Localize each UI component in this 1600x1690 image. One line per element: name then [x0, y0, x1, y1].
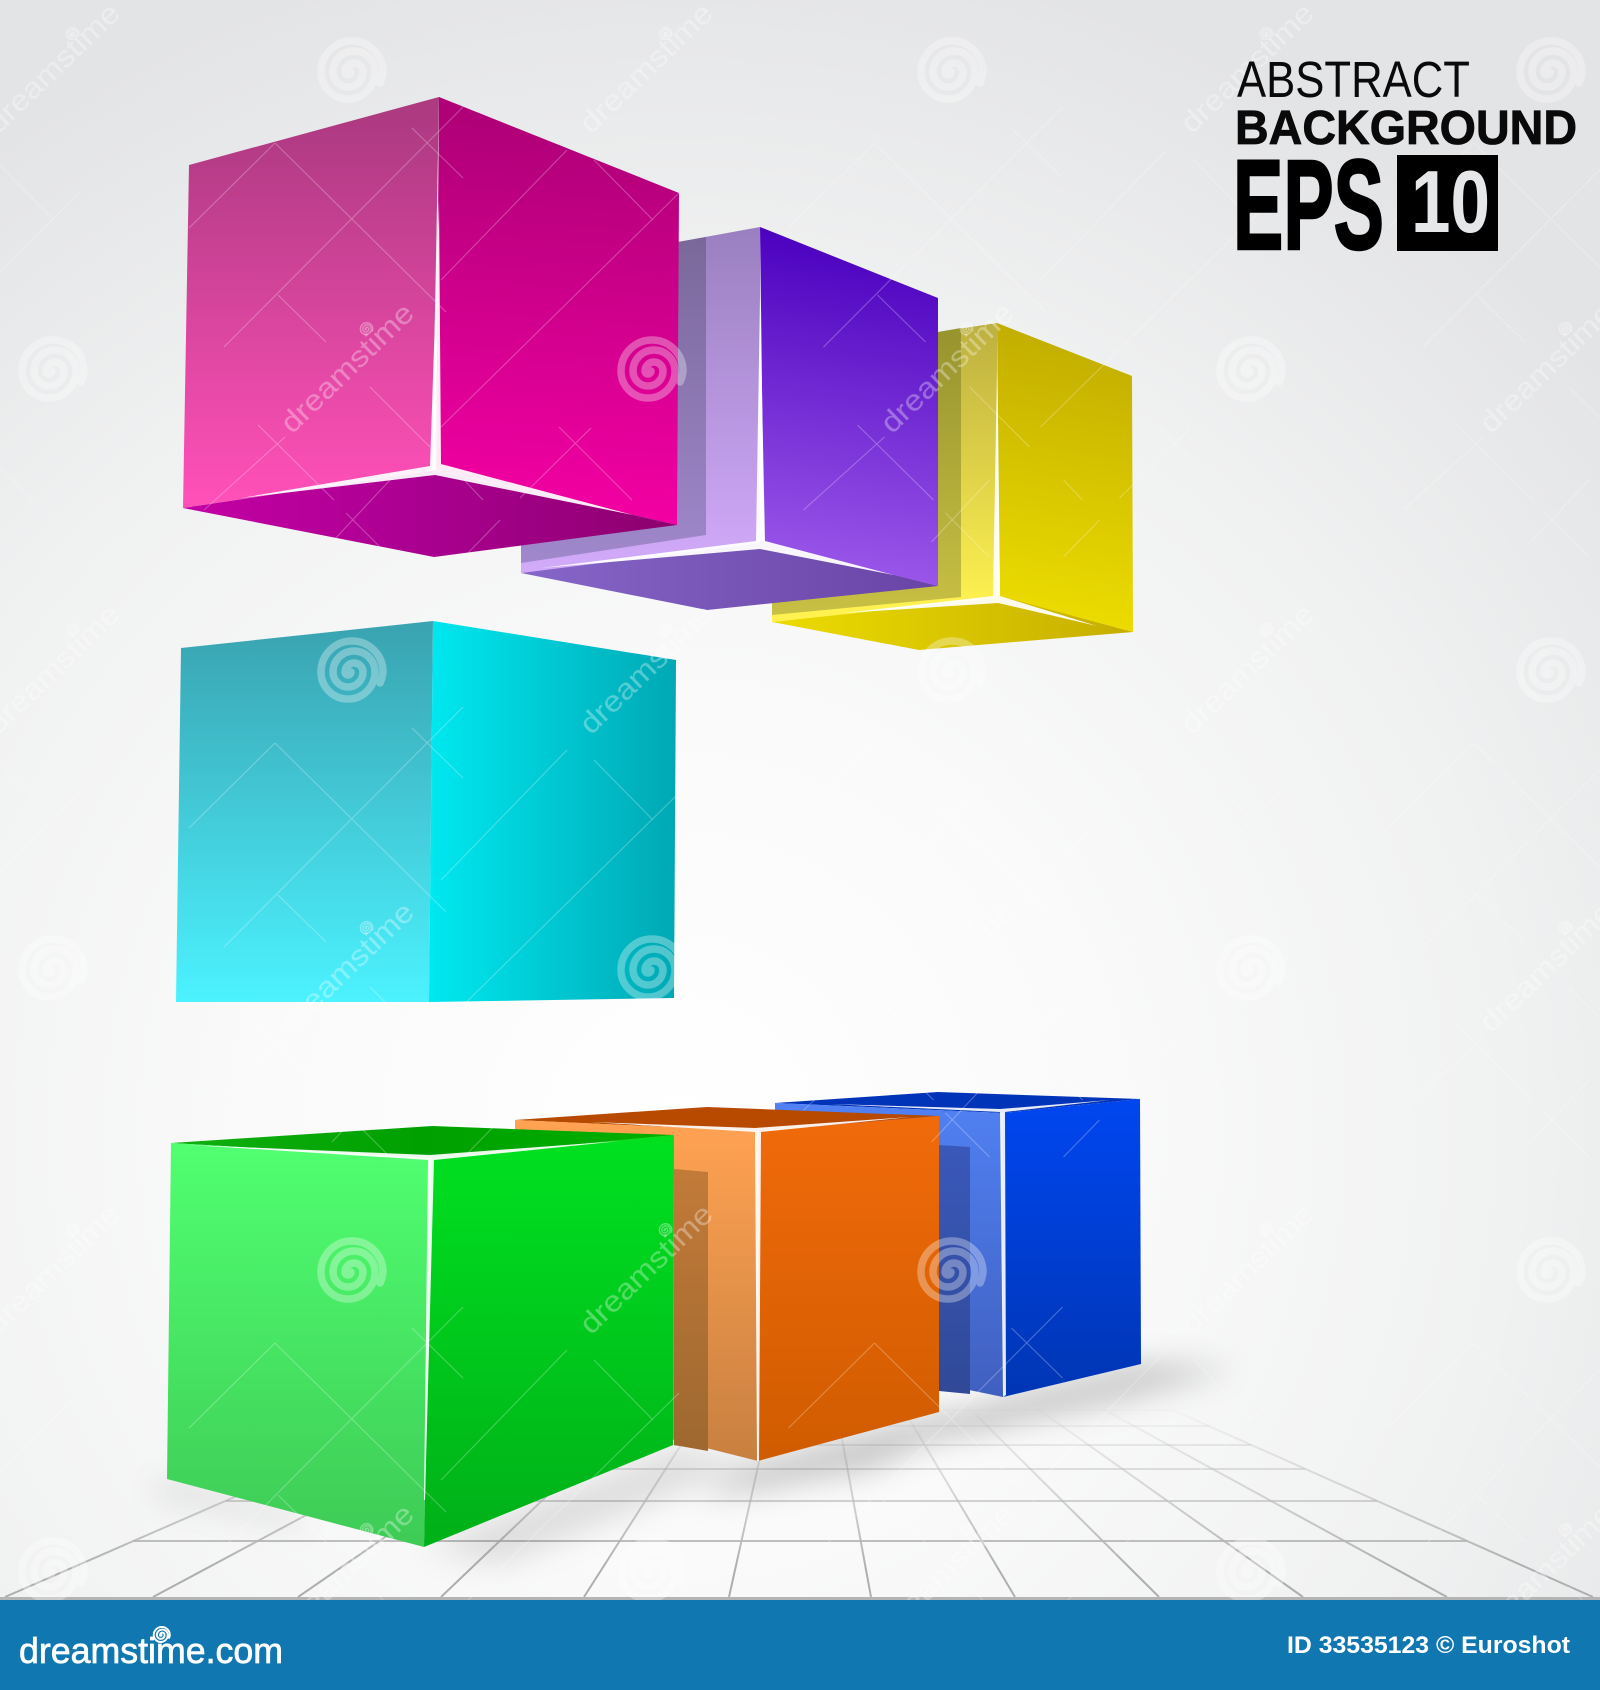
floor grid — [5, 1390, 1593, 1597]
yellow right face — [997, 323, 1133, 632]
watermark overlay: dreamstime — [573, 0, 720, 140]
cube: cyan — [176, 621, 676, 1002]
watermark overlay: dreamstime — [1174, 598, 1321, 741]
blue right face — [1003, 1099, 1141, 1397]
orange left face — [515, 1120, 758, 1461]
watermark overlay: dreamstime — [1174, 1198, 1321, 1341]
watermark overlay: dreamstime — [874, 297, 1021, 440]
watermark overlay: dreamstime — [573, 598, 720, 741]
footer bar — [0, 1600, 1600, 1690]
blue left face — [775, 1103, 1003, 1397]
cube: orange — [515, 1107, 939, 1461]
watermark overlay: dreamstime — [274, 1498, 421, 1641]
purple right face — [760, 227, 938, 586]
purple left face shadow — [521, 237, 706, 563]
yellow left face shadow — [772, 328, 961, 615]
yellow left face — [772, 323, 997, 622]
magenta right face — [436, 97, 679, 525]
purple left face — [521, 227, 760, 573]
yellow edge highlight — [844, 370, 1097, 626]
green left face — [167, 1143, 432, 1547]
watermark overlay: dreamstime — [1174, 0, 1321, 140]
heading: background: BACKGROUND — [1235, 102, 1577, 155]
magenta left face — [183, 97, 439, 508]
footer logo: dreamstime.com — [19, 1630, 283, 1671]
watermark overlay: dreamstime — [874, 896, 1021, 1039]
cube: green — [167, 1126, 674, 1547]
orange right face — [758, 1116, 939, 1461]
blue left face shadow — [938, 1145, 970, 1394]
blue edge highlight — [830, 1100, 1110, 1397]
watermark overlay: dreamstime — [573, 1198, 720, 1341]
magenta edge highlight — [241, 200, 633, 515]
footer image id: ID 33535123 © Euroshot — [1287, 1632, 1570, 1659]
floor shadows — [150, 1364, 1235, 1565]
badge: 10: 10 — [1411, 152, 1490, 251]
orange top face — [515, 1107, 939, 1131]
floor base line — [0, 1597, 1600, 1600]
watermark overlay: dreamstime — [874, 1498, 1021, 1641]
blue top face — [775, 1092, 1140, 1113]
magenta bottom face — [183, 470, 677, 557]
orange left face shadow — [674, 1169, 708, 1451]
cube: purple — [521, 227, 938, 610]
purple bottom face — [521, 540, 938, 610]
green edge highlight — [190, 1141, 620, 1500]
green top face — [171, 1126, 674, 1158]
green right face — [424, 1135, 674, 1547]
cube: blue — [775, 1092, 1141, 1397]
watermark overlay: dreamstime — [274, 297, 421, 440]
orange edge highlight — [590, 1117, 910, 1461]
cyan left face — [176, 621, 433, 1002]
heading: abstract: ABSTRACT — [1237, 51, 1470, 108]
purple edge highlight — [541, 297, 894, 575]
yellow bottom face — [772, 595, 1133, 650]
watermark overlay: dreamstime — [274, 896, 421, 1039]
cyan right face — [429, 621, 676, 1002]
cube: yellow — [772, 323, 1133, 650]
title block — [1233, 51, 1577, 277]
cube: magenta — [183, 97, 679, 557]
heading: eps: EPS — [1233, 134, 1384, 277]
